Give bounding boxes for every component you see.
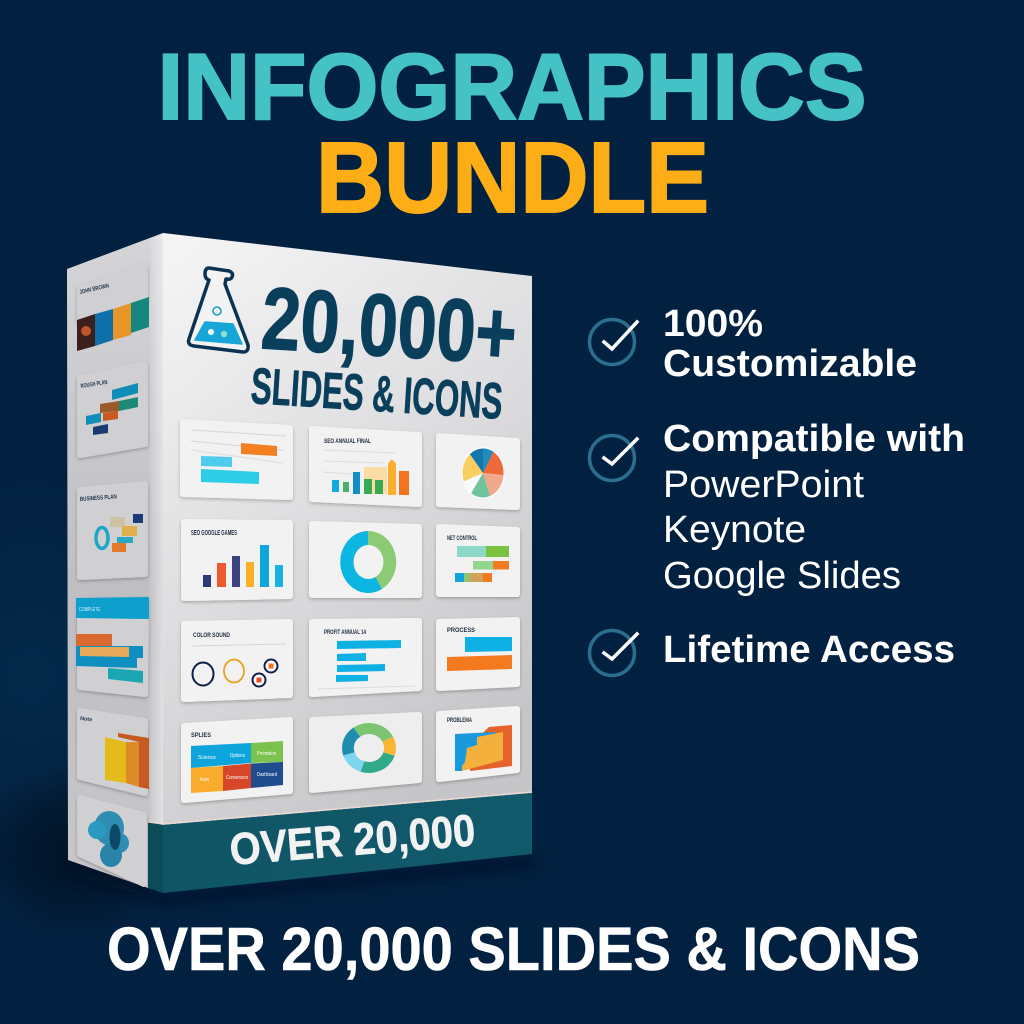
card: colour table: Science [198, 755, 216, 761]
card: blue and orange blocks: PROCESS [447, 628, 475, 634]
card: colour table: Promotion [257, 751, 276, 757]
band top edge [148, 792, 532, 824]
box ground shadow [70, 858, 535, 904]
card: circle icons: COLOR SOUND [193, 632, 230, 639]
side thumbnail: colour panels: JOHN BROWN [79, 283, 110, 296]
card: ring chart [312, 715, 419, 790]
icon: check circle [590, 436, 637, 480]
footer headline: OVER 20,000 SLIDES & ICONS [107, 915, 920, 983]
card: horizontal blue bars [312, 621, 419, 694]
side thumbnail: floating bars: ROUGH PLAN [80, 380, 108, 390]
card: stacked bars: NET CONTROL [447, 536, 477, 542]
card: column chart: SEO ANNUAL FINAL [324, 438, 371, 445]
card: column chart [312, 429, 419, 504]
box teal band front [163, 793, 532, 893]
card: colour table: Options [230, 753, 245, 759]
box front face [163, 233, 532, 825]
title: bundle: BUNDLE [316, 122, 709, 234]
side thumbnail: heat table: Note [80, 716, 92, 723]
title: infographics: INFOGRAPHICS [158, 34, 866, 139]
side thumbnail: blue header blocks [76, 597, 149, 694]
box side face [67, 233, 163, 888]
product box [0, 233, 535, 935]
heading: slides and icons: SLIDES & ICONS [249, 357, 504, 430]
box corner highlight [148, 233, 163, 825]
text: 100%: 100% [663, 303, 763, 345]
card: colour table [184, 720, 290, 800]
side thumbnail: cloud icon [80, 798, 144, 884]
card: colour table: Dashboard [257, 772, 277, 778]
card: colour table: Team [199, 777, 209, 783]
side thumbnail: heat table [80, 711, 149, 793]
card: blue and orange blocks [439, 620, 517, 688]
side thumbnail: mixed chart [80, 484, 145, 577]
feature: compatibility [590, 418, 965, 597]
card: colour table: SPLIES [191, 733, 211, 739]
feature: customizable [590, 303, 917, 385]
feature: lifetime access [590, 629, 955, 676]
card: bar chart: SEO GOOGLE GAMES [191, 530, 237, 537]
text: google slides: Google Slides [663, 555, 901, 597]
card: donut chart [312, 524, 419, 595]
text: lifetime access: Lifetime Access [663, 629, 955, 671]
icon: flask [189, 268, 248, 352]
box teal band side [148, 822, 163, 893]
icon: check circle [590, 320, 637, 364]
side thumbnail: mixed chart: BUSINESS PLAN [80, 494, 117, 503]
icon: check circle [590, 630, 637, 676]
card: horizontal blue bars: PROFIT ANNUAL 14 [324, 630, 366, 636]
side thumbnail: colour panels [77, 266, 149, 351]
text: compatible with: Compatible with [663, 418, 965, 460]
text: customizable: Customizable [663, 343, 917, 385]
side thumbnail: blue header blocks: COMPLETE [79, 607, 100, 613]
band label: over 20,000: OVER 20,000 [228, 804, 477, 875]
card: bar chart [184, 522, 290, 598]
card: horizontal bars [183, 422, 290, 497]
card: stair chart: PROBLEMA [447, 718, 472, 724]
card: stacked bars [439, 527, 517, 594]
heading: 20,000+: 20,000+ [259, 268, 520, 383]
text: powerpoint: PowerPoint [663, 464, 864, 506]
side thumbnail: floating bars [80, 364, 145, 455]
card: circle icons [184, 622, 290, 699]
card: stair chart [439, 709, 517, 779]
text: keynote: Keynote [663, 509, 806, 551]
card: colour table: Conversion [226, 775, 248, 781]
card: pie chart [439, 436, 517, 507]
box left shadow [0, 765, 175, 935]
